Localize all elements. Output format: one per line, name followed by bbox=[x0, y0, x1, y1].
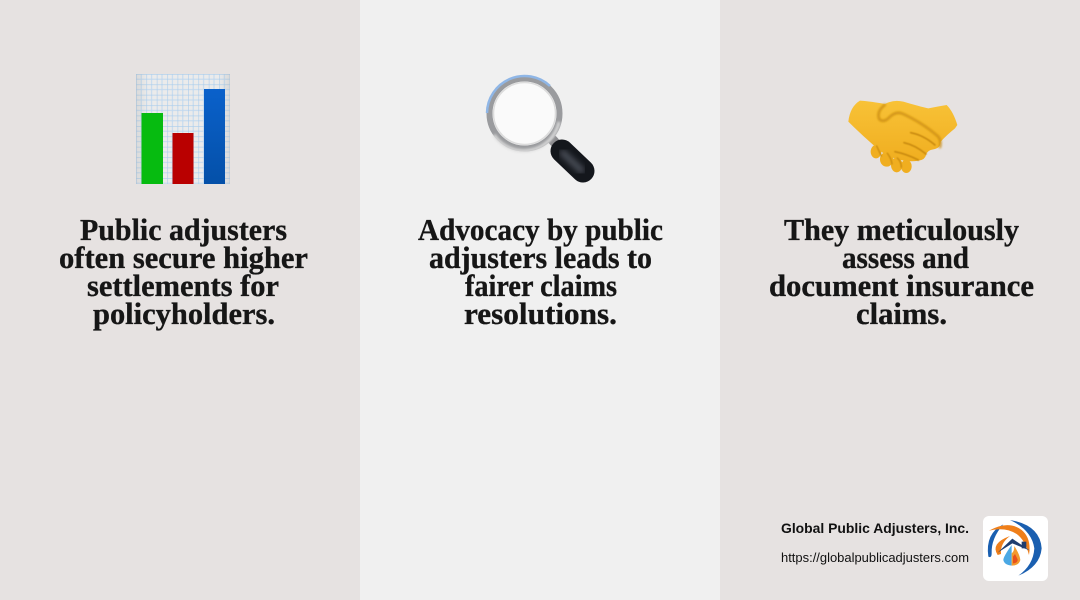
heading: fairer claims bbox=[418, 212, 663, 331]
heading: assess and document: assess and bbox=[842, 240, 969, 275]
heading: higher settlements: Public adjusters bbox=[80, 212, 287, 247]
heading: assess and document: claims. bbox=[856, 296, 947, 331]
heading: assess and document bbox=[769, 212, 1034, 331]
icon: handshake bbox=[848, 101, 957, 173]
heading: fairer claims: fairer claims bbox=[465, 268, 617, 303]
heading: fairer claims: resolutions. bbox=[464, 296, 617, 331]
icon: magnifying glass bbox=[487, 76, 583, 171]
panel: assess and document bbox=[720, 0, 1080, 600]
panel: fairer claims bbox=[360, 0, 720, 600]
heading: higher settlements bbox=[59, 212, 308, 331]
heading: higher settlements: policyholders. bbox=[93, 296, 275, 331]
heading: assess and document: They meticulously bbox=[784, 212, 1019, 247]
heading: higher settlements: settlements for bbox=[87, 268, 279, 303]
heading: assess and document: document insurance bbox=[769, 268, 1034, 303]
panel: higher settlements bbox=[0, 0, 360, 600]
company name: Global Public Adjusters, Inc. bbox=[781, 520, 969, 536]
icon: bar chart bbox=[136, 74, 230, 184]
heading: fairer claims: Advocacy by public bbox=[418, 212, 663, 247]
company URL: https://globalpublicadjusters.com bbox=[781, 551, 969, 565]
heading: fairer claims: adjusters leads to bbox=[429, 240, 652, 275]
heading: higher settlements: often secure higher bbox=[59, 240, 308, 275]
logo bbox=[983, 516, 1048, 581]
